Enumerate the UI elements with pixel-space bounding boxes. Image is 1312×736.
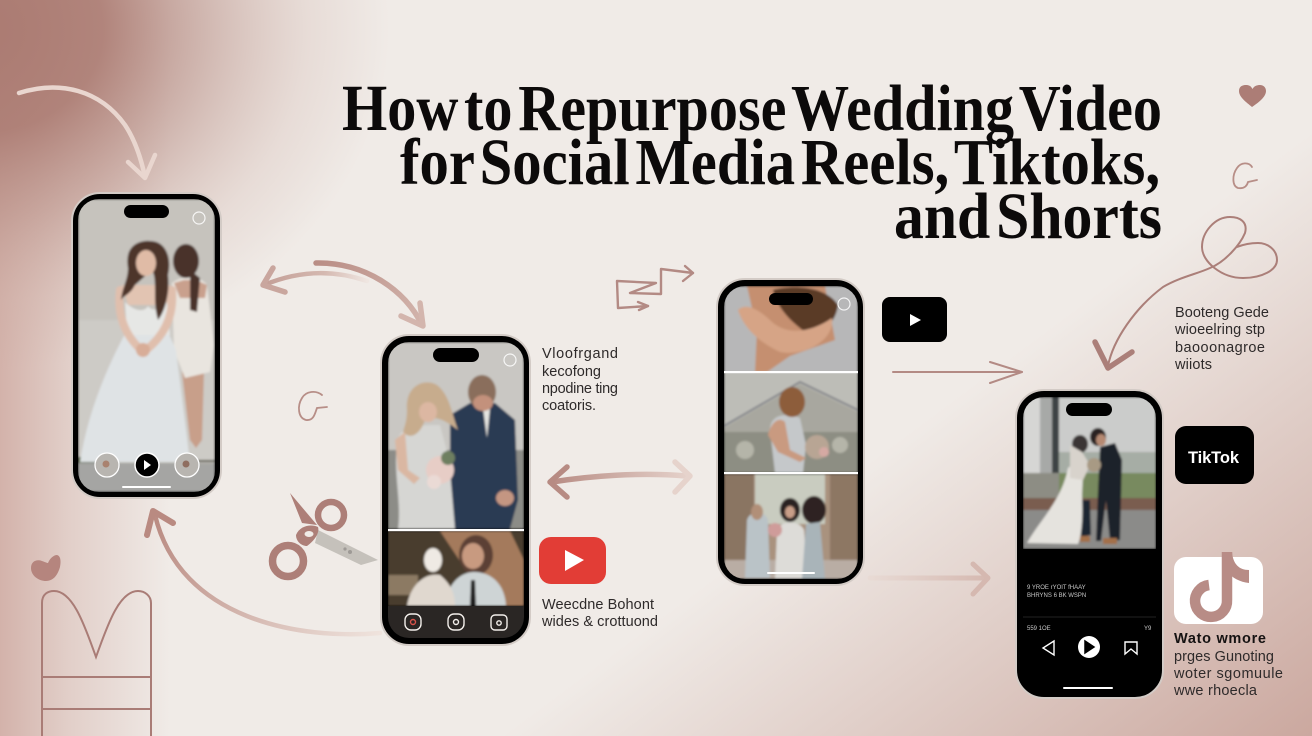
icon: small loop G right (1233, 163, 1257, 188)
panel: phone 1 (72, 193, 221, 498)
photo: couple with bouquet and groom below (388, 342, 524, 638)
text block: right upper: baooonagroe (1175, 340, 1265, 356)
text block: right lower: woter sgomuule (1173, 666, 1283, 682)
text block: right lower (1173, 631, 1283, 699)
notch (769, 293, 813, 305)
panel: phone 2 (381, 335, 530, 645)
text block: right upper: wioeelring stp (1174, 322, 1265, 338)
title: How to Repurpose Wedding Video (342, 72, 1162, 145)
caption text: 9 YROE rYOIT fHAAY (1027, 585, 1086, 591)
text block: right lower: Wato wmore (1174, 631, 1266, 647)
arrow: top-left curved into phone 1 (19, 88, 155, 178)
title (342, 72, 1162, 253)
icon: top-right circle (193, 212, 205, 224)
arrow: thin line to phone 4 (893, 362, 1022, 383)
text block: phone 2 upper: Vloofrgand (542, 346, 618, 362)
text block: phone 2 upper: coatoris. (542, 398, 596, 414)
player controls (1043, 636, 1137, 658)
control icons (405, 614, 507, 630)
text block: phone 2 upper: npodine ting (542, 381, 618, 397)
text block: phone 2 upper: kecofong (542, 364, 601, 380)
control: play button (135, 453, 159, 477)
title: and Shorts (894, 180, 1162, 253)
text block: right upper (1174, 305, 1269, 373)
caption text: 559 1OE (1027, 626, 1051, 632)
text block: phone 2 lower (541, 597, 658, 630)
text block: right lower: wwe rhoecla (1173, 683, 1258, 699)
arrow: sweeping curve back to phone 1 (147, 511, 380, 634)
icon: TikTok badge (1175, 426, 1254, 484)
icon: top-right circle (838, 298, 850, 310)
panel: phone 3 (717, 279, 864, 585)
photo: bride and friend (78, 199, 215, 492)
photo: couple by window (1023, 397, 1156, 691)
icon: scissors (272, 493, 378, 576)
text block: right lower: prges Gunoting (1174, 649, 1274, 665)
icon: heart top right (1239, 85, 1266, 107)
photo strip: three wedding frames (724, 286, 858, 579)
notch (433, 348, 479, 362)
arrow: zig-zag hand drawn (617, 266, 693, 310)
notch (124, 205, 169, 218)
icon: small loop G left (299, 392, 327, 420)
caption text (1027, 585, 1152, 632)
arrow: soft line from phone 3 to phone 4 (870, 564, 988, 594)
text block: phone 2 upper (542, 346, 618, 414)
text block: right upper: wiiots (1174, 357, 1212, 373)
arrow: double curve from phone 1 to phone 2 (263, 263, 423, 326)
icon: TikTok badge: TikTok (1188, 449, 1240, 467)
icon: black play button (882, 297, 947, 342)
caption text: BHRYNS 6 BK WSPN (1027, 593, 1086, 599)
panel: phone 4 (1016, 390, 1163, 698)
icon: outline veil shape bottom left (42, 591, 151, 736)
icon: heart bottom left (31, 555, 61, 581)
control: thumbnail right (175, 453, 199, 477)
icon: YouTube logo (539, 537, 606, 584)
icon: music note logo (1174, 552, 1263, 624)
text block: right upper: Booteng Gede (1175, 305, 1269, 321)
text block: phone 2 lower: wides & crottuond (541, 614, 658, 630)
caption text: Y9 (1144, 626, 1152, 632)
title: for Social Media Reels, Tiktoks, (400, 126, 1160, 199)
icon: top-right circle (504, 354, 516, 366)
text block: phone 2 lower: Weecdne Bohont (542, 597, 654, 613)
notch (1066, 403, 1112, 416)
arrow: double-headed between phone 2 and phone 3 (550, 462, 690, 497)
arrow: looping line into phone 4 (1095, 217, 1277, 368)
control: thumbnail left (95, 453, 119, 477)
